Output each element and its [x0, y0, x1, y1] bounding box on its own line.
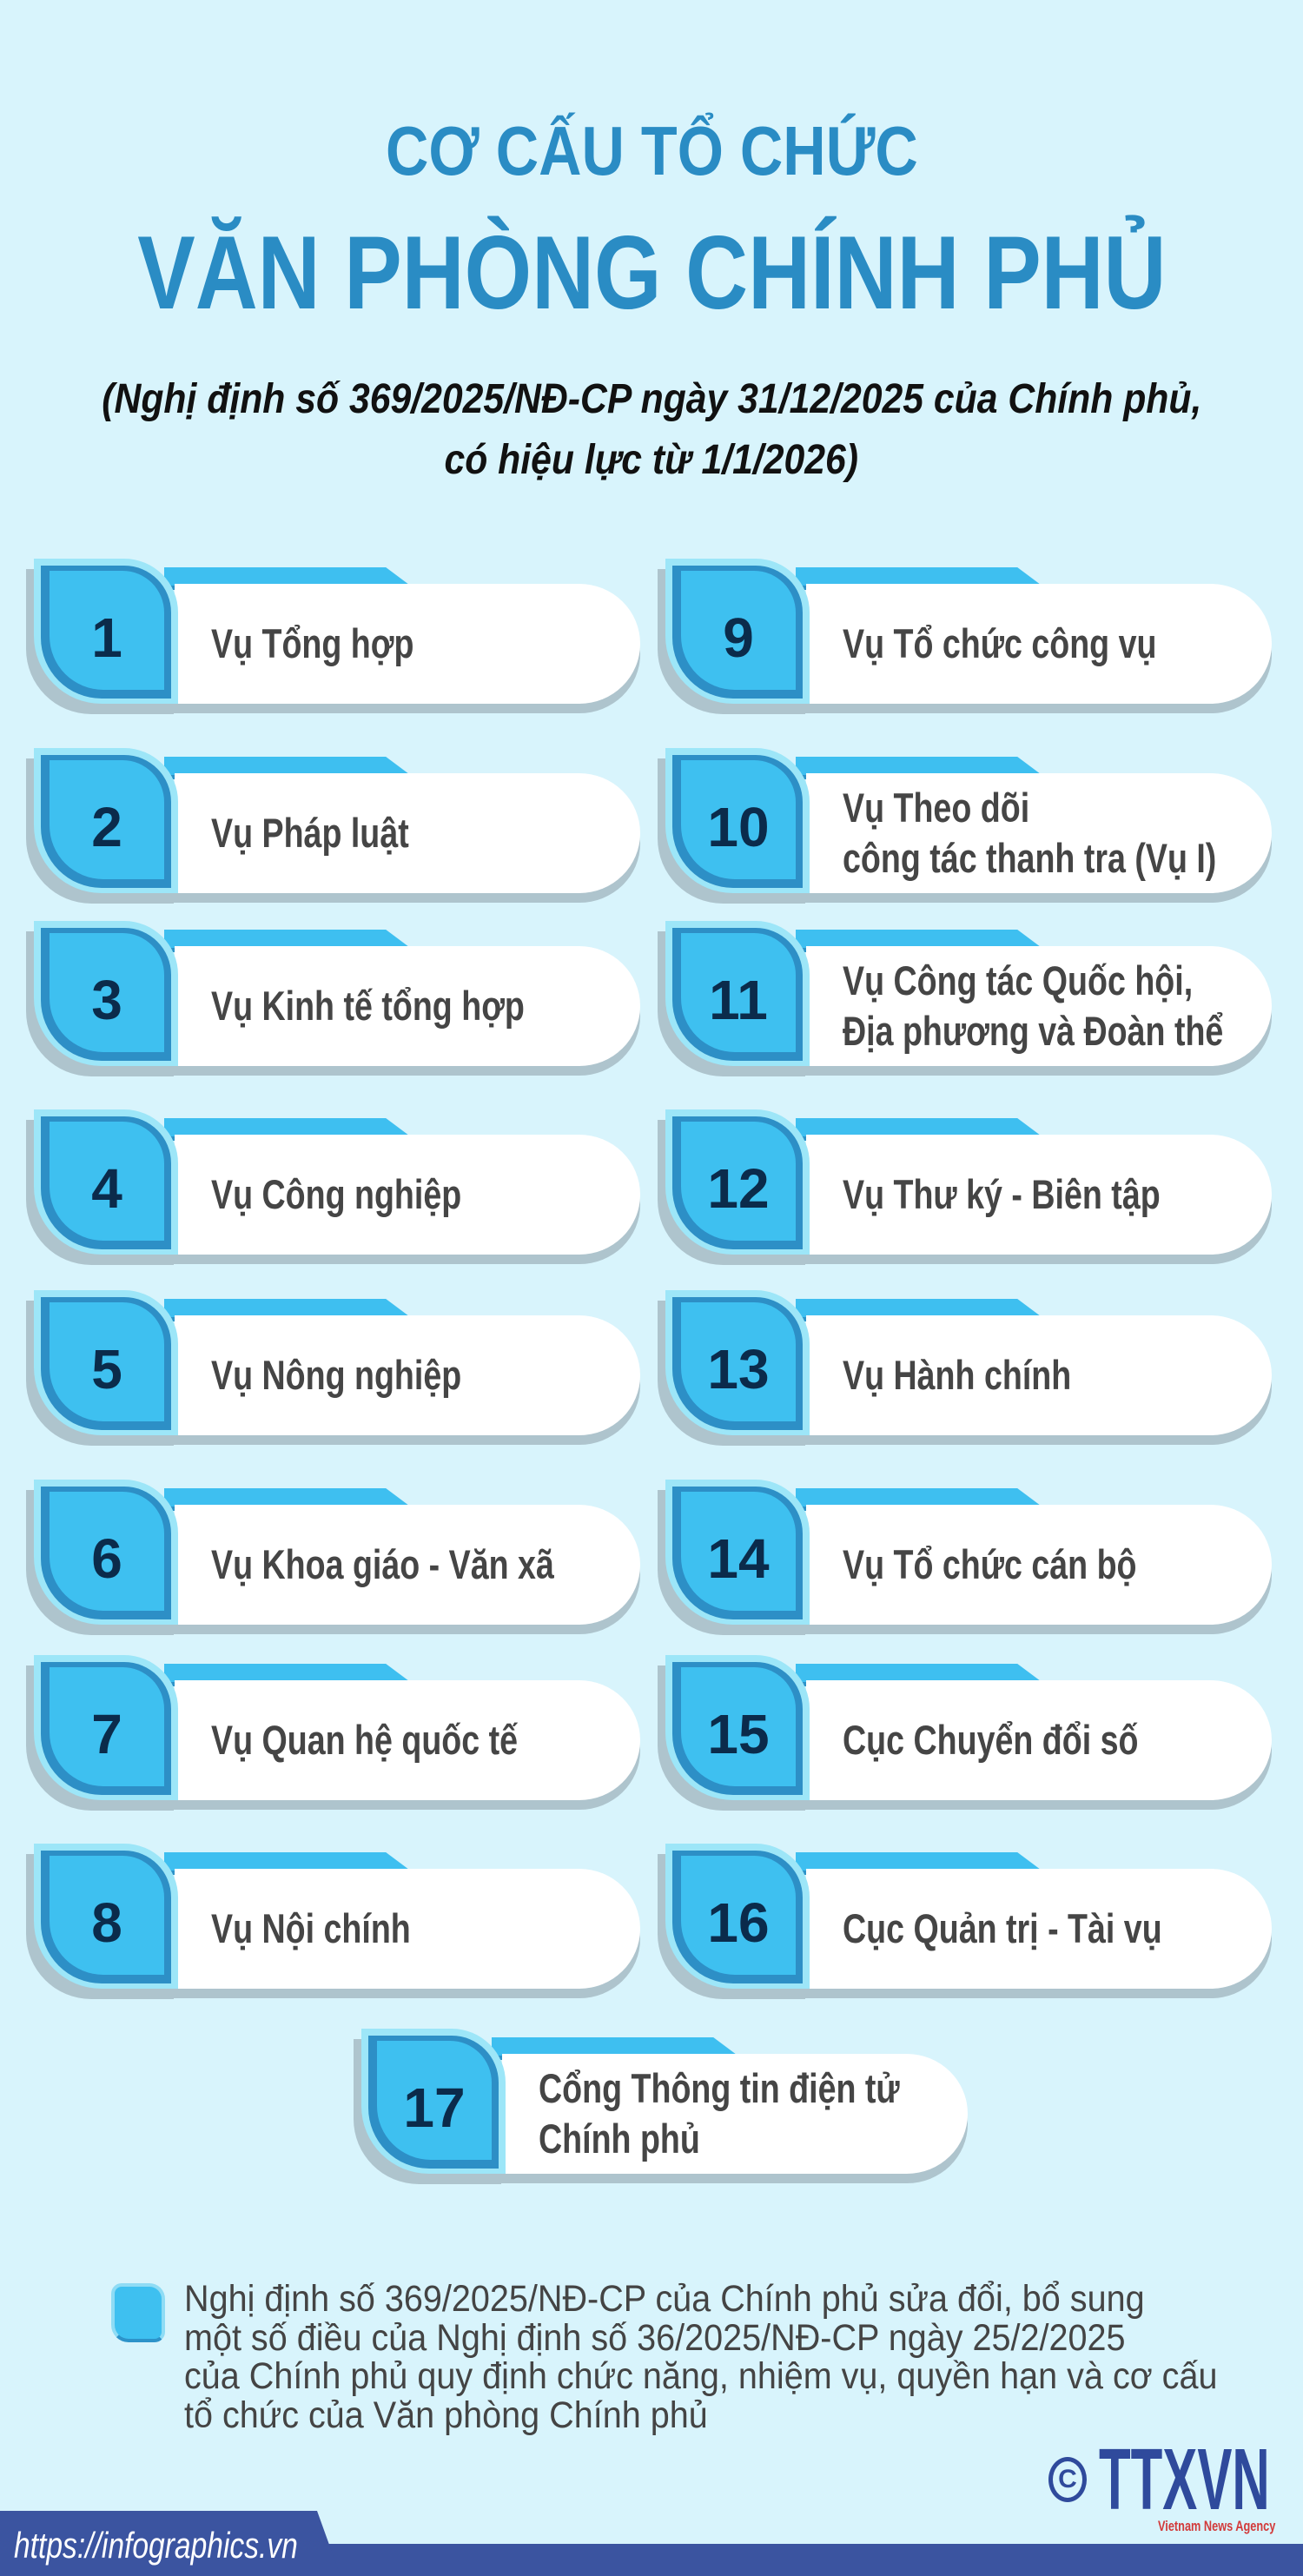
subtitle: (Nghị định số 369/2025/NĐ-CP ngày 31/12/2025 của Chính phủ, — [102, 376, 1201, 422]
logo: TTXVN: TTXVN — [1099, 2431, 1270, 2528]
item 12 — [658, 1109, 1272, 1265]
footnote text: một số điều của Nghị định số 36/2025/NĐ-CP ngày 25/2/2025 — [184, 2316, 1125, 2358]
footnote text — [184, 2278, 1217, 2436]
item 3: Vụ Kinh tế tổng hợp — [211, 983, 525, 1029]
item 12: Vụ Thư ký - Biên tập — [843, 1171, 1161, 1217]
item 17: Cổng Thông tin điện tử — [539, 2065, 900, 2111]
item 15: Cục Chuyển đổi số — [843, 1717, 1139, 1763]
item 6: Vụ Khoa giáo - Văn xã — [211, 1541, 554, 1587]
item 15: 15 — [707, 1703, 770, 1765]
item 9 — [658, 559, 1272, 714]
subtitle — [102, 376, 1201, 483]
item 11: Địa phương và Đoàn thể — [843, 1008, 1223, 1054]
footnote text: tổ chức của Văn phòng Chính phủ — [184, 2394, 708, 2436]
item 2: Vụ Pháp luật — [211, 810, 409, 856]
footnote text: Nghị định số 369/2025/NĐ-CP của Chính phủ sửa đổi, bổ sung — [184, 2278, 1145, 2320]
item 10: công tác thanh tra (Vụ I) — [843, 835, 1216, 881]
item 13 — [658, 1290, 1272, 1446]
item 7: 7 — [91, 1703, 122, 1765]
item 16 — [658, 1844, 1272, 1999]
title line 1: CƠ CẤU TỔ CHỨC — [386, 112, 917, 189]
item 7 — [26, 1655, 640, 1811]
icon: footnote marker — [111, 2283, 165, 2342]
item 12: 12 — [707, 1157, 770, 1220]
item 10: 10 — [707, 796, 770, 858]
item 4 — [26, 1109, 640, 1265]
item 10: Vụ Theo dõi — [843, 785, 1029, 831]
item 2: 2 — [91, 796, 122, 858]
logo: TTXVN: C — [1058, 2465, 1077, 2493]
footer bar with url — [0, 2511, 1303, 2576]
item 10 — [658, 748, 1272, 904]
item 16: Cục Quản trị - Tài vụ — [843, 1905, 1162, 1951]
item 4: 4 — [91, 1157, 122, 1220]
item 8: Vụ Nội chính — [211, 1905, 411, 1951]
item 14 — [658, 1480, 1272, 1635]
item 11 — [658, 921, 1272, 1076]
item 4: Vụ Công nghiệp — [211, 1171, 461, 1217]
item 8: 8 — [91, 1891, 122, 1953]
item 13: Vụ Hành chính — [843, 1352, 1071, 1398]
item 17 — [354, 2029, 968, 2184]
footer bar with url: https://infographics.vn — [14, 2525, 298, 2566]
footnote text: của Chính phủ quy định chức năng, nhiệm vụ, quyền hạn và cơ cấu — [184, 2355, 1217, 2397]
item 13: 13 — [707, 1338, 770, 1401]
item 11: 11 — [709, 968, 768, 1030]
item 2 — [26, 748, 640, 904]
item 3 — [26, 921, 640, 1076]
item 7: Vụ Quan hệ quốc tế — [211, 1717, 518, 1763]
item 8 — [26, 1844, 640, 1999]
item 5: Vụ Nông nghiệp — [211, 1352, 461, 1398]
logo: TTXVN: Vietnam News Agency — [1158, 2518, 1275, 2534]
item 3: 3 — [91, 968, 122, 1030]
title line 2: VĂN PHÒNG CHÍNH PHỦ — [137, 215, 1166, 331]
item 17: 17 — [403, 2076, 466, 2139]
item 5: 5 — [91, 1338, 122, 1401]
item 6 — [26, 1480, 640, 1635]
item 15 — [658, 1655, 1272, 1811]
item 14: Vụ Tổ chức cán bộ — [843, 1541, 1137, 1587]
item 9: Vụ Tổ chức công vụ — [843, 620, 1156, 666]
item 16: 16 — [707, 1891, 770, 1953]
item 1: 1 — [91, 606, 122, 669]
item 6: 6 — [91, 1527, 122, 1590]
item 11: Vụ Công tác Quốc hội, — [843, 957, 1193, 1003]
item 1 — [26, 559, 640, 714]
item 1: Vụ Tổng hợp — [211, 620, 413, 666]
item 5 — [26, 1290, 640, 1446]
item 17: Chính phủ — [539, 2116, 700, 2162]
item 9: 9 — [723, 606, 754, 669]
subtitle: có hiệu lực từ 1/1/2026) — [445, 437, 858, 483]
item 14: 14 — [707, 1527, 770, 1590]
